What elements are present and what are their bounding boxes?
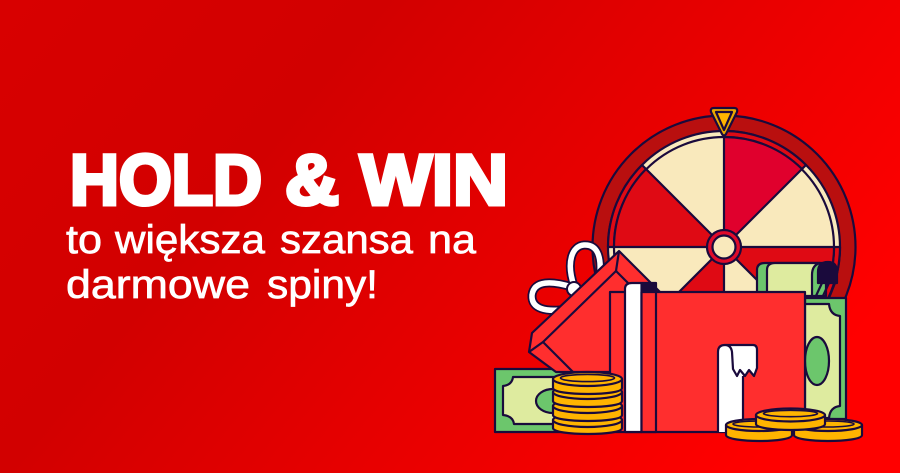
icon: scattered coins <box>726 408 862 441</box>
icon: banknote behind gift <box>757 262 846 419</box>
icon: ribbon bow <box>532 245 600 310</box>
title: & <box>285 142 339 220</box>
title: HOLD <box>70 142 262 220</box>
icon: prize wheel <box>592 108 856 378</box>
subtitle <box>66 218 477 307</box>
wheel hub <box>707 230 741 264</box>
subtitle: spiny! <box>267 263 378 307</box>
title: WIN <box>360 142 508 220</box>
icon: gift box lid <box>529 251 660 372</box>
subtitle: to <box>66 218 102 262</box>
subtitle: większa <box>114 218 266 262</box>
wheel pointer <box>711 108 737 136</box>
icon: gift box body <box>610 283 805 432</box>
icon: banknote left <box>495 369 575 432</box>
icon: ribbon tag <box>718 345 757 432</box>
icon: stacked coins <box>553 372 622 434</box>
subtitle: darmowe <box>66 263 250 307</box>
subtitle: szansa <box>280 218 414 262</box>
illustration: prize wheel, gift and money <box>495 108 862 441</box>
subtitle: na <box>428 218 477 262</box>
title <box>70 142 508 220</box>
